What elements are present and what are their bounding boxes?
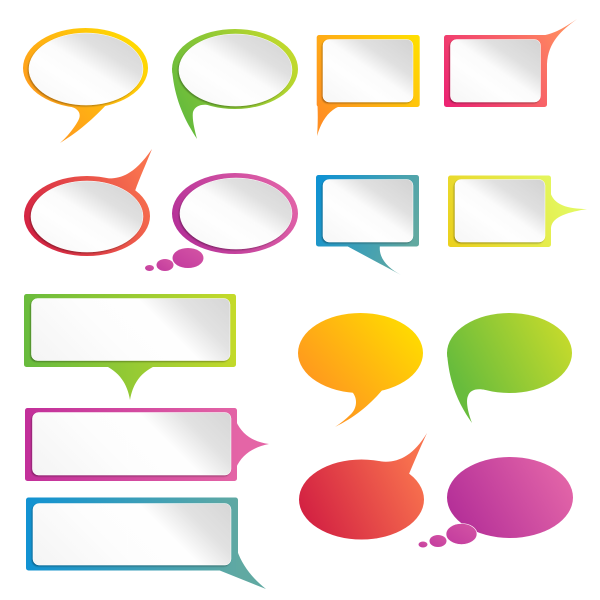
panel: orange oval speech bubble (23, 28, 148, 143)
panel: solid purple thought bubble (418, 457, 573, 548)
panel: solid red speech bubble (299, 433, 427, 540)
panel: orange rectangular speech bubble (317, 35, 420, 136)
panel: blue rectangular speech bubble (316, 175, 419, 275)
panel: yellow rectangular speech bubble (448, 176, 587, 247)
panel: wide magenta banner bubble (25, 408, 269, 481)
panel: pink rectangular speech bubble (444, 19, 577, 107)
panel: solid green speech bubble (447, 313, 572, 423)
panel: wide blue banner bubble (26, 498, 266, 589)
panel: solid orange speech bubble (298, 313, 423, 427)
panel: wide green banner bubble (24, 294, 236, 400)
panel: green oval speech bubble (172, 29, 298, 139)
panel: red oval speech bubble (24, 149, 152, 256)
panel: purple oval thought bubble (145, 173, 298, 271)
